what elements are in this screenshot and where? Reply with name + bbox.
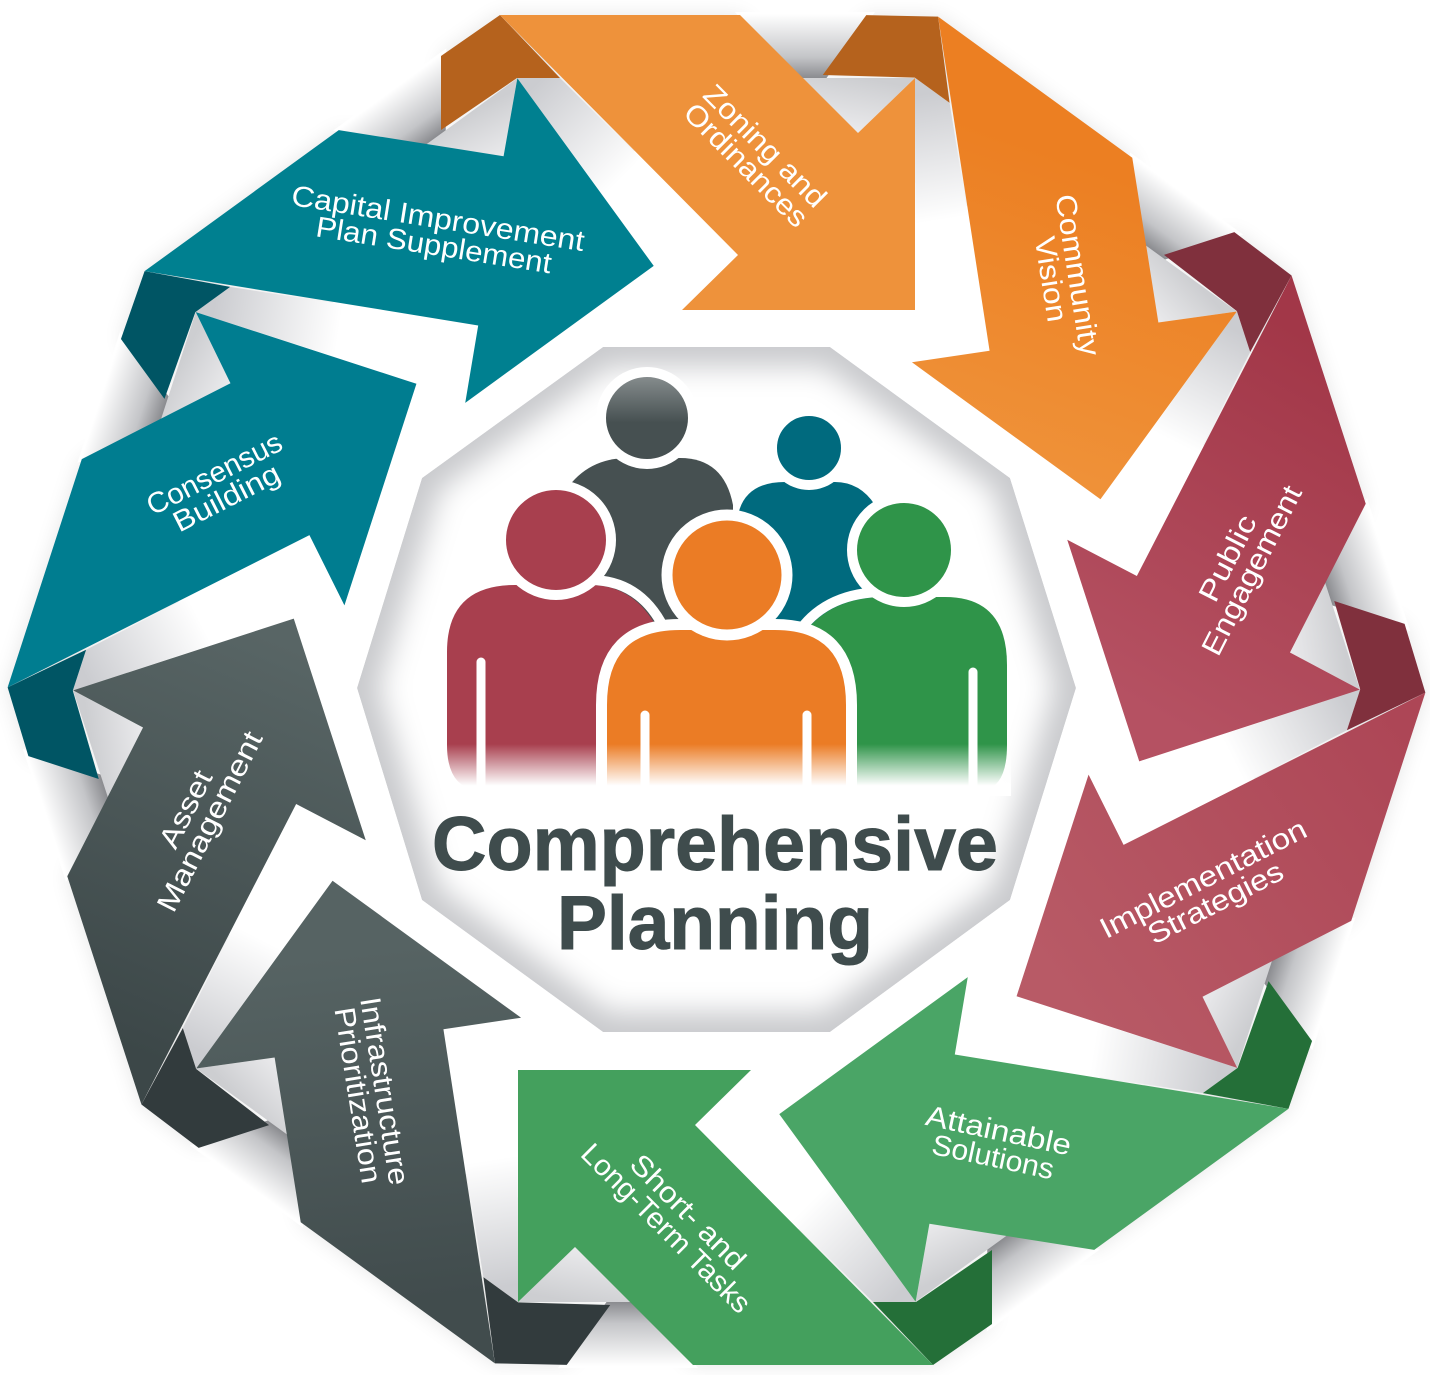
arrow: Short- and Long-Term Tasks: Short- and (623, 1148, 752, 1277)
arrow: Attainable Solutions: Attainable (923, 1100, 1074, 1162)
arrow: Infrastructure Prioritization (159, 881, 668, 1363)
arrow: Asset Management (13, 619, 422, 1104)
arrow: Consensus Building (8, 293, 416, 778)
arrow: Infrastructure Prioritization: Prioritization (327, 1005, 387, 1186)
person: green (800, 498, 1007, 790)
title: Comprehensive (432, 802, 998, 887)
icon: group of five people (444, 372, 1011, 796)
arrow: Zoning and Ordinances: Ordinances (677, 97, 814, 234)
person: crimson (447, 485, 665, 790)
arrow: Implementation Strategies: Strategies (1143, 856, 1289, 951)
title (432, 802, 998, 966)
title: Planning (557, 881, 873, 966)
fade at base of figures (444, 744, 1011, 796)
arrow: Public Engagement (1011, 276, 1420, 761)
arrow: Community Vision: Community (1048, 192, 1105, 359)
arrow: Capital Improvement Plan Supplement (145, 27, 654, 510)
central decagon panel (357, 347, 1076, 1032)
person: grey (566, 372, 733, 640)
arrow: Short- and Long-Term Tasks: Long-Term Tasks (574, 1138, 757, 1320)
arrow: Attainable Solutions (779, 870, 1288, 1353)
arrow: Asset Management: Management (151, 726, 270, 917)
arrow: Asset Management: Asset (153, 765, 219, 854)
arrow: Public Engagement: Public (1193, 510, 1264, 607)
arrow: Zoning and Ordinances: Zoning and (697, 79, 832, 214)
arrow: Implementation Strategies: Implementation (1095, 813, 1312, 945)
arrow: Community Vision (765, 17, 1274, 499)
arrow: Public Engagement: Engagement (1196, 481, 1309, 661)
arrow: Capital Improvement Plan Supplement: Capital Improvement (289, 180, 587, 258)
arrow: Consensus Building: Building (168, 458, 286, 539)
arrow: Attainable Solutions: Solutions (929, 1129, 1057, 1186)
arrow: Zoning and Ordinances (500, 15, 915, 310)
person: orange (602, 515, 852, 795)
arrow: Community Vision: Vision (1028, 234, 1073, 324)
arrow: Short- and Long-Term Tasks (518, 1070, 933, 1365)
arrow: Infrastructure Prioritization: Infrastructure (353, 995, 415, 1187)
arrow: Consensus Building: Consensus (141, 426, 288, 522)
arrow: Implementation Strategies (1017, 602, 1425, 1087)
person: teal (738, 411, 875, 640)
arrow: Capital Improvement Plan Supplement: Plan Supplement (314, 211, 554, 280)
